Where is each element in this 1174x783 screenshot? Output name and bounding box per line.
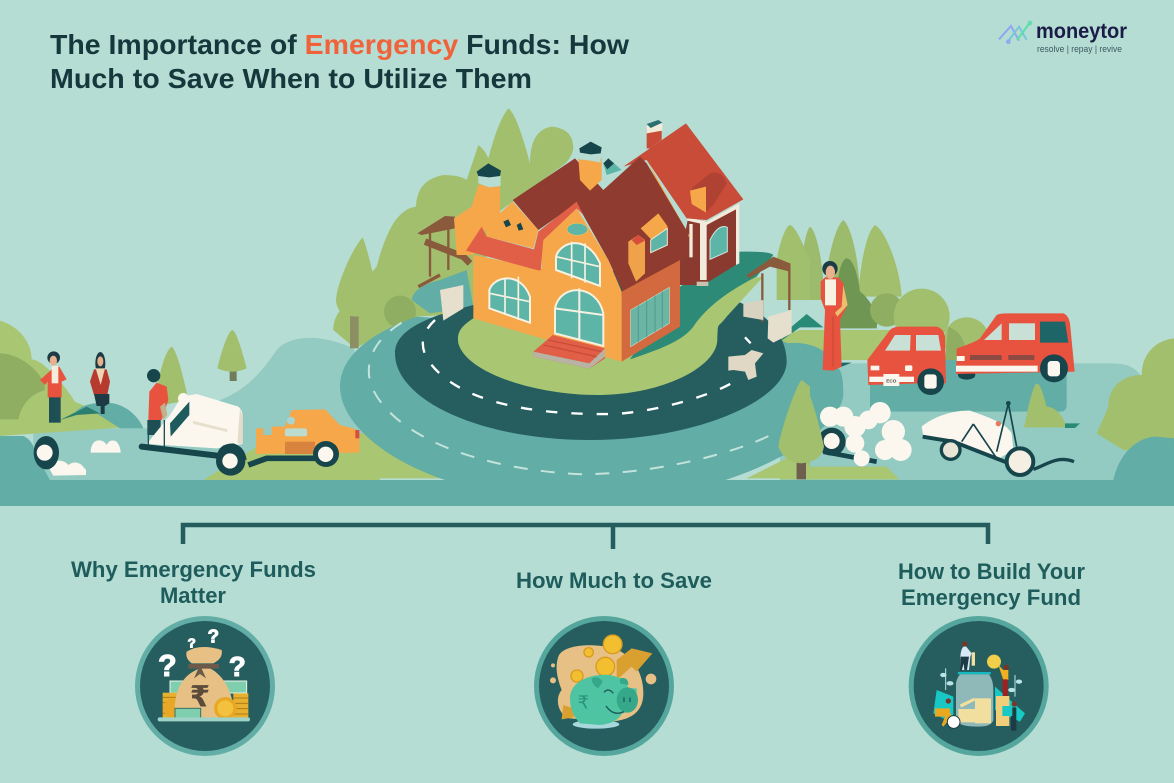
roof vent	[692, 173, 727, 213]
sack right	[768, 310, 792, 343]
wrecked car	[922, 401, 1074, 475]
left pergola	[417, 216, 470, 287]
sack left	[440, 285, 463, 321]
inner road	[395, 267, 787, 440]
icon: money bag	[135, 616, 275, 756]
icon: money bag: ?	[208, 626, 219, 647]
orange car	[248, 409, 359, 467]
attic window	[567, 223, 588, 235]
facade	[473, 208, 622, 362]
right pergola	[743, 257, 790, 322]
right tree	[780, 380, 810, 479]
heading: how to build your emergency fund: How to Build Your	[898, 559, 1085, 584]
bracket connector	[183, 525, 988, 549]
lawn	[458, 277, 763, 395]
steps	[533, 335, 605, 369]
clouds	[50, 440, 121, 476]
title	[50, 29, 629, 94]
back wing	[680, 203, 739, 286]
icon: savings jar	[909, 616, 1049, 756]
orange under roof	[647, 160, 690, 237]
person 3	[147, 369, 168, 435]
left people and vehicles	[34, 351, 359, 476]
landscape background	[0, 220, 1174, 506]
moneytor logo: resolve | repay | revive	[1037, 44, 1122, 55]
title: Much to Save When to Utilize Them	[50, 63, 532, 94]
red car front: ECO	[886, 378, 897, 383]
icon: piggy bank: ₹	[578, 692, 589, 713]
moneytor logo	[999, 20, 1127, 55]
left chimney	[454, 185, 500, 255]
person 1	[40, 351, 67, 423]
teal strip	[0, 480, 1174, 506]
bright red roof	[623, 123, 743, 220]
red car front	[867, 327, 946, 395]
heading: how to build your emergency fund	[898, 559, 1085, 610]
window: upper arch	[556, 242, 600, 286]
person 2	[90, 352, 110, 414]
right people and vehicles	[778, 261, 1075, 479]
heading: how to build your emergency fund: Emergency Fund	[901, 585, 1081, 610]
dormer	[641, 213, 667, 240]
outer road dashes	[369, 323, 780, 474]
side window	[631, 287, 669, 347]
heading: why emergency funds matter: Why Emergency Funds	[71, 557, 316, 582]
main roof	[513, 157, 688, 293]
front chimney	[578, 158, 602, 191]
standing man	[821, 261, 852, 371]
side wall	[622, 260, 680, 362]
heading: how much to save: How Much to Save	[516, 568, 712, 593]
title: The Importance of Emergency Funds: How	[50, 29, 629, 60]
eaves	[466, 202, 583, 271]
central house scene	[293, 108, 843, 502]
heading: why emergency funds matter: Matter	[160, 583, 226, 608]
window: door arch	[555, 288, 603, 346]
gable	[485, 202, 538, 248]
tree front	[778, 380, 824, 479]
small window back	[603, 158, 622, 175]
icon: money bag: ?	[158, 649, 177, 683]
left wheel	[34, 436, 59, 469]
icon: money bag: ₹	[190, 680, 210, 714]
outer road	[340, 317, 843, 502]
trees behind house	[293, 108, 810, 478]
inner road dashes	[423, 320, 751, 414]
goat	[728, 350, 763, 380]
smoke cloud car	[818, 402, 912, 466]
icon: money bag: ?	[229, 651, 246, 682]
icon: piggy bank	[534, 616, 674, 756]
icon: money bag: ?	[188, 635, 196, 650]
window: left arch	[489, 277, 530, 323]
white truck	[142, 393, 247, 476]
back chimney	[647, 128, 662, 148]
moneytor logo: moneytor	[1036, 20, 1127, 43]
red car rear	[956, 313, 1075, 382]
heading: why emergency funds matter	[71, 557, 316, 608]
green path	[630, 252, 773, 359]
logo mark	[999, 22, 1031, 43]
